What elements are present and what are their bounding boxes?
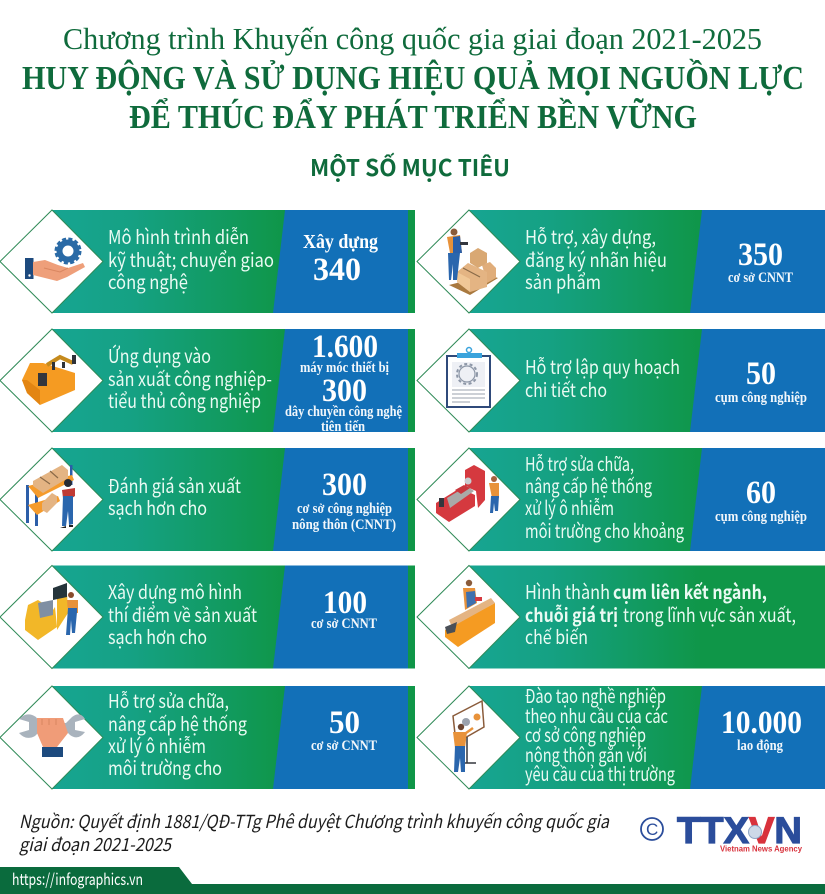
figure: 50: cơ sở CNNT: [311, 738, 377, 754]
figure: 1.600 and 300: tiên tiến: [321, 419, 366, 435]
text block: Hỗ trợ sửa chữa,: [108, 687, 229, 714]
icon: trainer at board: [453, 701, 484, 772]
footer url: https://infographics.vn: [12, 866, 143, 890]
text block: Hỗ trợ sửa chữa,: [525, 450, 634, 477]
text block: nâng cấp hệ thống: [525, 472, 652, 499]
title: [22, 21, 804, 136]
figure: 60: 60: [746, 475, 776, 511]
logo: TTXVN: C: [646, 820, 658, 839]
text block: [525, 223, 667, 295]
text block: sạch hơn cho: [108, 623, 207, 650]
figure: 1.600 and 300: dây chuyền công nghệ: [285, 404, 402, 420]
text block: trong lĩnh vực sản xuất,: [623, 601, 796, 628]
panel: right row 3: [417, 448, 825, 551]
figure: 300: cơ sở công nghiệp: [297, 501, 392, 517]
text block: chi tiết cho: [525, 376, 607, 403]
text block: nâng cấp hệ thống: [108, 710, 247, 737]
icon: worker at shelves: [26, 465, 75, 528]
figure: 1.600 and 300: 1.600: [312, 329, 378, 365]
text block: [108, 687, 247, 781]
icon: red machine and worker: [436, 465, 499, 522]
figure: 100: [311, 585, 377, 632]
figure: 300: 300: [322, 467, 367, 503]
panel: right row 2: [417, 329, 825, 432]
figure: 100: cơ sở CNNT: [311, 616, 377, 632]
panel: left row 2: [0, 329, 415, 435]
source note: Nguồn: Quyết định 1881/QĐ-TTg Phê duyệt Chương trình khuyến công quốc gia: [19, 808, 610, 834]
figure: 50 clusters: [715, 356, 807, 406]
figure: 10.000: [721, 705, 802, 754]
figure: 1.600 and 300: máy móc thiết bị: [300, 360, 389, 376]
text block: tiểu thủ công nghiệp: [108, 387, 261, 414]
figure: 350: cơ sở CNNT: [728, 270, 793, 286]
icon: worker at yellow machine: [25, 583, 78, 640]
icon: orange machine: [22, 355, 76, 405]
text block: [108, 342, 272, 414]
text block: kỹ thuật; chuyển giao: [108, 246, 274, 273]
figure: 1.600 and 300: 300: [322, 373, 367, 409]
icon: worker at conveyor: [445, 580, 495, 647]
text block: [525, 353, 680, 403]
figure: 50 clusters: cụm công nghiệp: [715, 390, 807, 406]
figure: 1.600 and 300: [285, 329, 402, 435]
footer bar: [0, 866, 825, 894]
text block: Ứng dụng vào: [108, 342, 211, 369]
figure: 50: [311, 705, 377, 754]
text block: [525, 578, 796, 650]
text block: [525, 682, 675, 787]
text block: sản xuất công nghiệp-: [108, 365, 272, 392]
text block: [108, 578, 257, 650]
icon: worker with boxes: [447, 228, 498, 295]
text block: đăng ký nhãn hiệu: [525, 246, 667, 273]
figure: 300: nông thôn (CNNT): [292, 517, 396, 533]
text block: công nghệ: [108, 268, 188, 295]
panel: right row 4: [417, 566, 825, 668]
figure: 340: 340: [313, 252, 361, 288]
source note: giai đoạn 2021-2025: [19, 831, 173, 857]
panel: left row 1: [0, 210, 415, 313]
figure: 10.000: 10.000: [721, 705, 802, 741]
section heading: MỘT SỐ MỤC TIÊU: [310, 149, 510, 183]
text block: thí điểm về sản xuất: [108, 601, 257, 628]
text block: [108, 472, 241, 521]
text block: [108, 223, 274, 295]
panel: left row 3: [0, 448, 415, 551]
text block: sản phẩm: [525, 268, 601, 295]
text block: nông thôn gắn với: [525, 741, 647, 768]
title line: headline 2: ĐỂ THÚC ĐẨY PHÁT TRIỂN BỀN VỮNG: [129, 97, 697, 136]
text block: Hỗ trợ lập quy hoạch: [525, 353, 680, 380]
text block: xử lý ô nhiễm: [108, 732, 206, 759]
figure: 50 clusters: 50: [746, 356, 776, 392]
text block: theo nhu cầu của các: [525, 702, 668, 729]
text block: sạch hơn cho: [108, 494, 207, 521]
icon: fist holding wrench: [19, 714, 85, 757]
text block: [525, 450, 684, 544]
panel: left row 5: [0, 686, 415, 789]
panel: left row 4: [0, 566, 415, 668]
icon: hand with gear: [25, 239, 85, 281]
icon: clipboard with gear: [447, 348, 490, 407]
figure: 340: Xây dựng: [303, 231, 378, 253]
panel: right row 5: [417, 682, 825, 789]
text block: chuỗi giá trị: [525, 601, 618, 628]
source note: [19, 808, 610, 857]
text block: Hình thành: [525, 578, 610, 605]
text block: cơ sở công nghiệp: [525, 721, 646, 748]
figure: 350: [728, 237, 793, 286]
logo: TTXVN: TTXVN: [677, 810, 802, 851]
text block: cụm liên kết ngành,: [613, 578, 767, 605]
text block: Mô hình trình diễn: [108, 223, 249, 250]
text block: môi trường cho khoảng: [525, 517, 684, 544]
figure: 340: [303, 231, 378, 288]
text block: Đánh giá sản xuất: [108, 472, 241, 499]
text block: Hỗ trợ, xây dựng,: [525, 223, 656, 250]
text block: yêu cầu của thị trường: [525, 760, 675, 787]
panel: right row 1: [417, 210, 825, 313]
text block: Đào tạo nghề nghiệp: [525, 682, 666, 709]
figure: 50: 50: [329, 705, 360, 741]
figure: 10.000: lao động: [737, 738, 783, 754]
figure: 300: [292, 467, 396, 533]
text block: xử lý ô nhiễm: [525, 494, 614, 521]
figure: 60: [715, 475, 807, 525]
text block: môi trường cho: [108, 754, 222, 781]
figure: 100: 100: [323, 585, 367, 621]
title line: programme name: Chương trình Khuyến công quốc gia giai đoạn 2021-2025: [63, 21, 762, 56]
text block: Xây dựng mô hình: [108, 578, 242, 605]
figure: 60: cụm công nghiệp: [715, 509, 807, 525]
logo: TTXVN: Vietnam News Agency: [720, 844, 803, 854]
figure: 350: 350: [738, 237, 783, 273]
text block: chế biến: [525, 623, 588, 650]
